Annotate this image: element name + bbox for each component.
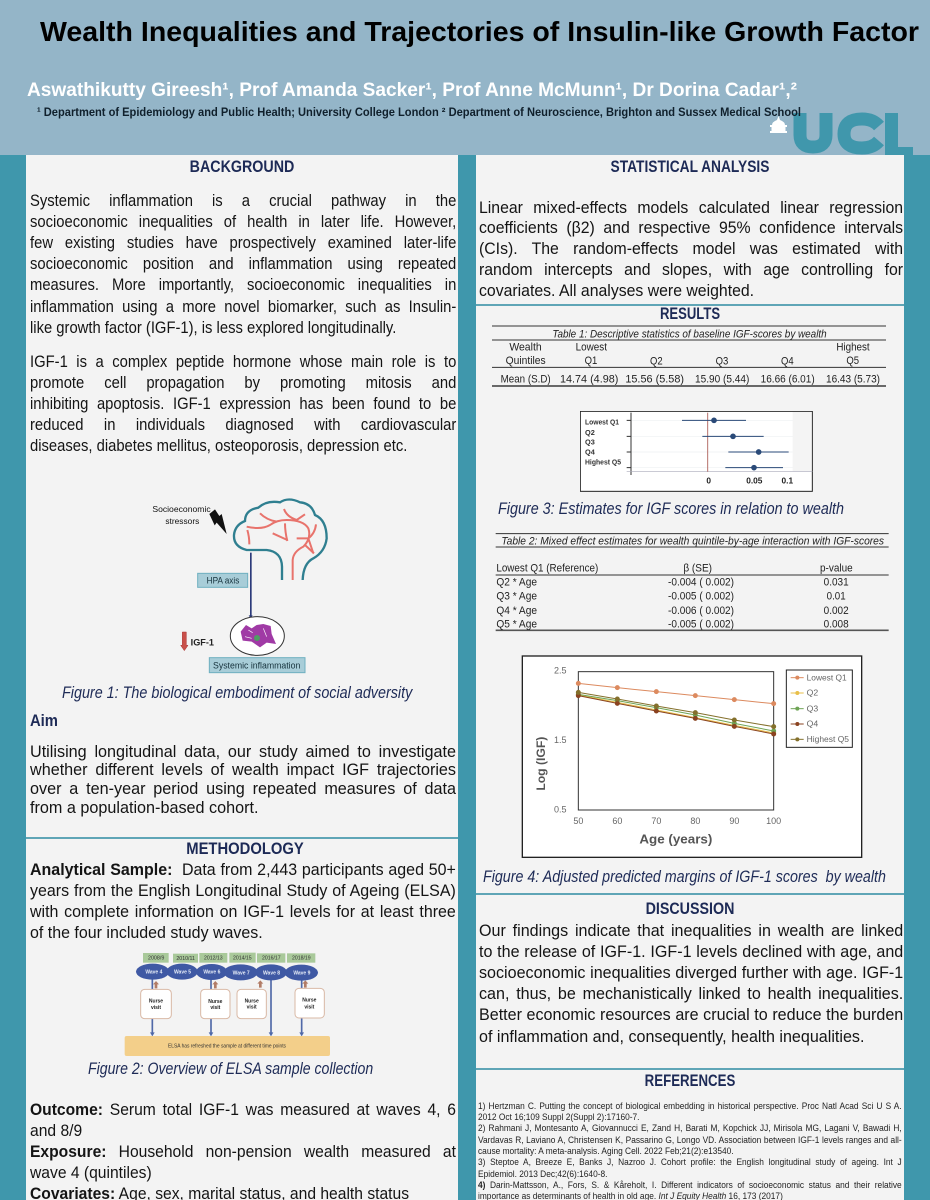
table 2: -0.005 ( 0.002) (668, 619, 734, 631)
text: references: Vardavas R, Laviano A, Christensen K, Passarino G, Longo VD. Association between IGF-1 levels ranges and all- (478, 1135, 902, 1146)
figure 3: forest plot: Q2 (585, 428, 595, 437)
icon: lightning stressor (209, 509, 227, 534)
text: analytical sample (30, 860, 456, 942)
text: references: 1) Hertzman C. Putting the concept of biological embedding in historical perspective. Proc Natl Acad Sci U S A. (478, 1100, 902, 1112)
text: background paragraph 2: IGF-1 is a complex peptide hormone whose main role is to (30, 352, 456, 370)
text: aim (30, 742, 456, 817)
text: discussion: can, thus, be mechanistically linked to health inequalities. (479, 984, 903, 1003)
figure 2: ELSA wave timeline: visit (247, 1004, 257, 1010)
text: background paragraph 1: few existing studies have prospectively examined later-life (30, 233, 456, 252)
axis tick labels (554, 666, 781, 826)
panel: right column (476, 155, 904, 1200)
figure 2: ELSA wave timeline: Nurse (302, 998, 317, 1004)
figure 2: ELSA wave timeline: Wave 9 (293, 971, 311, 977)
text: outcome exposure covariates: Exposure: Household non-pension wealth measured at (30, 1142, 456, 1160)
text: background paragraph 2: inhibiting apoptosis. IGF-1 expression has been found to be (30, 394, 456, 413)
heading: statistical analysis: STATISTICAL ANALYSIS (611, 157, 769, 176)
table 1: Q3 (716, 355, 728, 367)
text: references: cause mortality: A meta-analysis. Aging Cell. 2022 Feb;21(2):e13540. (478, 1146, 734, 1157)
text: analytical sample: with complete information on IGF-1 levels for at least three (30, 902, 456, 921)
axis titles: Age (years) (639, 832, 712, 847)
table 1: Mean (S.D) (501, 374, 551, 386)
estimates with confidence intervals (682, 418, 789, 470)
year labels: 2016/17 (262, 956, 281, 962)
text: discussion (479, 920, 903, 1046)
text: references (478, 1100, 902, 1200)
table 2: 0.01 (827, 591, 846, 603)
legend (786, 670, 852, 747)
table 2: Table 2: Mixed effect estimates for wealth quintile-by-age interaction with IGF-scores (501, 536, 885, 548)
text: analytical sample: years from the English Longitudinal Study of Ageing (ELSA) (30, 881, 456, 900)
year labels: 2008/9 (148, 956, 164, 962)
series: Lowest Q1 (576, 681, 776, 706)
heading: discussion: DISCUSSION (646, 899, 734, 918)
figure 3: forest plot: Q3 (585, 437, 595, 446)
header band (0, 0, 930, 155)
caption: figure 1: Figure 1: The biological embodiment of social adversity (62, 684, 412, 702)
figure 3: forest plot: Lowest Q1 (585, 418, 619, 427)
refreshment bar (125, 1036, 330, 1056)
text: outcome exposure covariates: wave 4 (quintiles) (30, 1162, 152, 1182)
table 1: Q4 (781, 355, 794, 367)
axis tick labels: 100 (766, 816, 781, 826)
text: outcome exposure covariates: Outcome: Serum total IGF-1 was measured at waves 4, 6 (30, 1100, 456, 1118)
figure 3: forest plot: Q4 (585, 447, 596, 456)
icon: UCL portico (770, 116, 787, 133)
axis tick labels: 1.5 (554, 735, 567, 745)
text: background paragraph 1: inflammation using a more novel biomarker, such as Insulin- (30, 297, 456, 316)
text: background paragraph 1: measures. More importantly, socioeconomic inequalities in (30, 275, 456, 294)
series: Highest Q5 (576, 690, 776, 729)
caption: figure 4: Figure 4: Adjusted predicted margins of IGF-1 scores by wealth (483, 868, 886, 886)
table 1: Highest (836, 342, 870, 354)
panel: left column (26, 155, 458, 1200)
text: aim: Utilising longitudinal data, our study aimed to investigate (30, 742, 456, 760)
text: outcome exposure covariates: and 8/9 (30, 1120, 82, 1140)
figure 4: line chart of predicted IGF by age (522, 655, 862, 858)
legend: Q4 (807, 719, 818, 729)
figure 3: forest plot: 0 (706, 475, 711, 485)
table 1: Lowest (576, 342, 607, 354)
text: references: 2) Rahmani J, Montesanto A, Giovannucci E, Zand H, Barati M, Kopchick JJ, Mirisola MG, Lagani V, Bawadi H, (478, 1123, 902, 1134)
table 2: Q3 * Age (496, 591, 537, 603)
figure 3: forest plot: Highest Q5 (585, 458, 621, 467)
text: outcome exposure covariates (30, 1100, 456, 1200)
text: background paragraph 2: promote cell propagation by promoting mitosis and (30, 373, 456, 392)
axis tick labels: 90 (729, 816, 739, 826)
series: Q4 (576, 694, 776, 736)
figure 2: ELSA wave timeline: Wave 7 (233, 970, 250, 976)
text: references: 3) Steptoe A, Breeze E, Banks J, Nazroo J. Cohort profile: the English longitudinal study of ageing. Int J (478, 1157, 902, 1168)
year labels: 2014/15 (233, 955, 252, 961)
label: systemic inflammation (209, 658, 305, 673)
table 1: Q2 (650, 355, 663, 367)
figure 2: ELSA wave timeline: Nurse (245, 998, 259, 1004)
figure 3: forest plot (580, 411, 813, 492)
arrow: HPA down (249, 553, 253, 619)
text: analytical sample: of the four included study waves. (30, 923, 263, 942)
title: Wealth Inequalities and Trajectories of Insulin-like Growth Factor (40, 16, 919, 47)
axis tick labels: 70 (651, 816, 661, 826)
label: HPA axis: HPA axis (207, 575, 240, 585)
text: background paragraph 1: like growth factor (IGF-1), is less explored longitudinally. (30, 318, 396, 337)
table 2: Q5 * Age (496, 619, 537, 631)
text: discussion: Better economic resources are crucial to reduce the burden (479, 1005, 903, 1024)
figure 2: ELSA wave timeline (124, 952, 330, 1056)
label: HPA axis (198, 573, 248, 587)
table 1: 15.90 (5.44) (695, 374, 749, 386)
text: background paragraph 1: Systemic inflammation is a crucial pathway in the (30, 190, 456, 210)
up arrows (153, 980, 308, 988)
icon: brain outline (234, 500, 327, 580)
year labels (143, 953, 315, 963)
legend: Q2 (807, 688, 818, 698)
table 1: 15.56 (5.58) (625, 374, 684, 386)
legend: Highest Q5 (807, 734, 849, 744)
table 1: Wealth (509, 342, 542, 354)
label: stressors: Socioeconomic (152, 504, 211, 514)
nurse visit lines (152, 975, 302, 1033)
figure 2: ELSA wave timeline: Nurse (149, 998, 163, 1004)
axis tick labels: 50 (573, 816, 583, 826)
heading: references: REFERENCES (645, 1071, 735, 1090)
figure 2: ELSA wave timeline: visit (304, 1004, 315, 1010)
text: statistical analysis: coefficients (β2) and respective 95% confidence intervals (479, 218, 903, 237)
table 1: 16.43 (5.73) (826, 374, 880, 386)
table 1: 16.66 (6.01) (761, 374, 815, 386)
table 2: p-value (820, 563, 853, 575)
text: discussion: to the release of IGF-1. IGF-1 levels declined with age, and (479, 942, 903, 961)
series: Q2 (578, 695, 776, 735)
heading: aim: Aim (30, 710, 58, 730)
figure 2: ELSA wave timeline: visit (210, 1005, 221, 1011)
affiliations: ¹ Department of Epidemiology and Public Health; University College London ² Department of Neuroscience, Brighton and Sussex Medical School (37, 105, 801, 119)
table 2: -0.004 ( 0.002) (668, 577, 734, 589)
text: discussion: Our findings indicate that inequalities in wealth are linked (479, 920, 903, 940)
table 2: -0.006 ( 0.002) (668, 605, 734, 617)
axis tick labels: 80 (690, 816, 700, 826)
authors: Aswathikutty Gireesh¹, Prof Amanda Sacker¹, Prof Anne McMunn¹, Dr Dorina Cadar¹,² (27, 80, 797, 101)
text: analytical sample: Analytical Sample: Data from 2,443 participants aged 50+ (30, 860, 456, 879)
table 2: 0.002 (824, 605, 849, 617)
nurse visit boxes (141, 988, 324, 1019)
text: background paragraph 2: reduced in individuals diagnosed with cardiovascular (30, 415, 456, 434)
heading: background: BACKGROUND (190, 157, 294, 176)
label: stressors: stressors (165, 516, 200, 526)
text: background paragraph 1: socioeconomic inequalities of health in later life. However, (30, 212, 456, 231)
axis tick labels: 2.5 (554, 666, 567, 676)
text: background paragraph 2 (30, 352, 456, 455)
table 1: Table 1: Descriptive statistics of baseline IGF-scores by wealth (552, 328, 827, 340)
legend: Lowest Q1 (807, 672, 847, 682)
text: background paragraph 1: socioeconomic position and inflammation using repeated (30, 254, 456, 273)
text: aim: from a population-based cohort. (30, 798, 259, 817)
year labels: 2010/11 (176, 956, 195, 962)
figure 4: line chart of predicted IGF by age: Log (IGF) (534, 737, 548, 791)
table 2 (496, 533, 889, 632)
table 2: Q4 * Age (496, 605, 537, 617)
caption: figure 2: Figure 2: Overview of ELSA sample collection (88, 1060, 373, 1078)
text: discussion: socioeconomic inequalities diverged further with age. IGF-1 (479, 963, 903, 982)
table 2: β (SE) (683, 563, 712, 575)
icon: protein ellipse (230, 617, 284, 655)
year labels: 2012/13 (204, 955, 223, 961)
figure 2: ELSA wave timeline: Wave 5 (174, 970, 191, 976)
table 1: Quintiles (506, 355, 546, 367)
text: references: 2012 Oct 16;109 Suppl 2(Suppl 2):17160-7. (478, 1112, 639, 1123)
UCL logo (770, 112, 913, 155)
figure 3: forest plot: 0.1 (782, 475, 793, 485)
figure 1: biological embodiment diagram (152, 498, 328, 674)
caption: figure 3: Figure 3: Estimates for IGF scores in relation to wealth (498, 500, 844, 518)
figure 2: ELSA wave timeline: Nurse (208, 999, 223, 1005)
figure 2: ELSA wave timeline: Wave 4 (145, 970, 163, 976)
heading: results: RESULTS (660, 304, 720, 323)
text: discussion: of inflammation and, consequently, health inequalities. (479, 1027, 864, 1046)
text: references: 4) Darin-Mattsson, A., Fors, S. & Kåreholt, I. Different indicators of socioeconomic status and their relative (478, 1180, 902, 1191)
label: stressors (152, 504, 211, 526)
arrow: IGF-1 down (181, 632, 188, 651)
text: statistical analysis: Linear mixed-effects models calculated linear regression (479, 198, 903, 217)
axis tick labels: 60 (612, 816, 622, 826)
table 2: -0.005 ( 0.002) (668, 591, 734, 603)
table 2: Lowest Q1 (Reference) (496, 563, 598, 575)
table 2: 0.031 (824, 577, 849, 589)
label: IGF-1: IGF-1 (191, 638, 214, 648)
text: background paragraph 2: diseases, diabetes mellitus, osteoporosis, depression etc. (30, 436, 407, 455)
text: background paragraph 1 (30, 190, 456, 337)
wave ellipses (136, 964, 318, 981)
figure 3: forest plot: 0.05 (746, 475, 763, 485)
text: aim: whether different levels of wealth impact IGF trajectories (30, 760, 456, 779)
year labels: 2018/19 (292, 956, 311, 962)
table 2: Q2 * Age (496, 577, 537, 589)
table 1 (492, 326, 886, 387)
label: systemic inflammation: Systemic inflammation (213, 660, 300, 670)
figure 2: ELSA wave timeline: visit (151, 1005, 161, 1011)
figure 2: ELSA wave timeline: Wave 8 (263, 970, 280, 976)
axis tick labels: 0.5 (554, 804, 567, 814)
refreshment bar: ELSA has refreshed the sample at different time points (168, 1044, 286, 1050)
table 2: 0.008 (824, 619, 849, 631)
series: Q3 (576, 692, 776, 733)
text: statistical analysis: covariates. All analyses were weighted. (479, 281, 754, 300)
table 1: Q5 (846, 355, 859, 367)
text: references: Epidemiol. 2013 Dec;42(6):1640-8. (478, 1169, 607, 1180)
text: statistical analysis (479, 198, 903, 300)
legend: Q3 (807, 703, 818, 713)
text: statistical analysis: random intercepts and slopes, with age controlling for (479, 260, 903, 279)
table 1: Q1 (585, 355, 597, 367)
heading: methodology: METHODOLOGY (186, 839, 304, 858)
icon: brain vessels (247, 509, 316, 580)
text: statistical analysis: (CIs). The random-effects model was estimated with (479, 239, 903, 258)
table 1: 14.74 (4.98) (560, 374, 618, 386)
text: aim: over a ten-year period using repeated measures of data (30, 779, 456, 798)
figure 2: ELSA wave timeline: Wave 6 (203, 970, 221, 976)
